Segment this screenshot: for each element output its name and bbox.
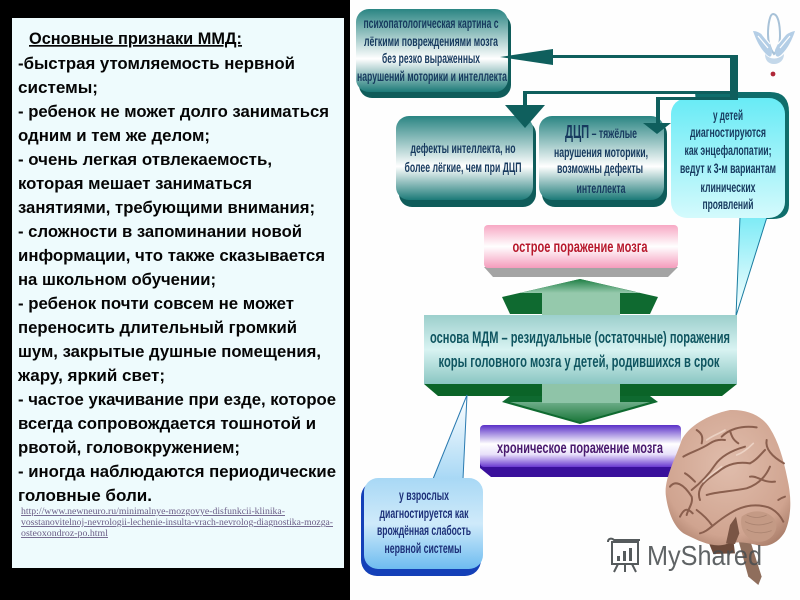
- arrow: to intellect defects box: [505, 91, 733, 128]
- source link: [21, 506, 333, 538]
- text block: list of signs: информации, что также сказывается: [18, 246, 325, 265]
- box: intellect defects: более лёгкие, чем при ДЦП: [404, 159, 522, 175]
- callout: in children: у детей: [713, 107, 743, 123]
- bar: chronic brain damage: хроническое поражение мозга: [497, 440, 663, 457]
- watermark: MyShared: [608, 539, 762, 572]
- text block: list of signs: - ребенок почти совсем не может: [18, 294, 294, 313]
- box: cerebral palsy: ДЦП – тяжёлые: [565, 122, 637, 142]
- callout: in children: [671, 92, 789, 316]
- bar: acute brain damage: острое поражение мозга: [512, 239, 648, 256]
- text block: list of signs: - частое укачивание при езде, которое: [18, 390, 336, 409]
- callout: in adults: диагностируется как: [380, 505, 469, 521]
- watermark: MyShared: MyShared: [647, 540, 762, 571]
- box: psychopathological picture: лёгкими повреждениями мозга: [364, 33, 498, 49]
- text block: list of signs: переносить длительный громкий: [18, 318, 297, 337]
- text block: list of signs: занятиями, требующими внимания;: [18, 198, 315, 217]
- callout: in adults: врождённая слабость: [377, 522, 471, 538]
- arrow: to cerebral palsy box: [643, 97, 738, 134]
- panel: list of MMD signs: [12, 18, 344, 568]
- text block: list of signs: рвотой, головокружением;: [18, 438, 240, 457]
- bar: chronic brain damage: [480, 425, 681, 477]
- text block: list of signs: одним и тем же делом;: [18, 126, 210, 145]
- white right panel background: [350, 0, 800, 600]
- box: cerebral palsy: интеллекта: [576, 180, 626, 196]
- box: cerebral palsy: нарушения моторики,: [554, 144, 648, 160]
- box: psychopathological picture: без резко выраженных: [382, 50, 480, 66]
- callout: in adults: [361, 395, 483, 576]
- text block: list of signs: головные боли.: [18, 486, 152, 505]
- text block: list of signs: - сложности в запоминании новой: [18, 222, 302, 241]
- box: intellect defects: [396, 116, 536, 207]
- heading: main signs of MMD: Основные признаки ММД:: [29, 29, 242, 48]
- callout: in children: проявлений: [702, 196, 754, 212]
- text block: list of signs: всегда сопровождается тошнотой и: [18, 414, 316, 433]
- text block: list of signs: жару, яркий свет;: [17, 366, 165, 385]
- text block: list of signs: -быстрая утомляемость нервной: [18, 54, 295, 73]
- text block: list of signs: - очень легкая отвлекаемость,: [18, 150, 272, 169]
- text block: list of signs: которая мешает заниматься: [18, 174, 252, 193]
- band: basis of MDM: [424, 315, 737, 384]
- text block: list of signs: [17, 54, 336, 505]
- double arrow: acute and chronic: [424, 279, 737, 424]
- source link: osteoxondroz-po.html: [21, 528, 109, 538]
- logo: winged emblem: [753, 14, 795, 76]
- box: intellect defects: дефекты интеллекта, но: [410, 140, 516, 156]
- text block: list of signs: на школьном обучении;: [18, 270, 216, 289]
- text block: list of signs: - ребенок не может долго заниматься: [18, 102, 329, 121]
- box: psychopathological picture: нарушений моторики и интеллекта: [357, 68, 507, 84]
- callout: in adults: у взрослых: [399, 487, 449, 503]
- bar: acute brain damage: [484, 225, 678, 277]
- arrow: to psychopathological box: [500, 49, 738, 98]
- box: psychopathological picture: [356, 9, 511, 98]
- icon: presentation board: [608, 539, 640, 572]
- text block: list of signs: шум, закрытые душные помещения,: [18, 342, 321, 361]
- text block: list of signs: системы;: [18, 78, 98, 97]
- callout: in adults: нервной системы: [384, 540, 462, 556]
- text block: list of signs: - иногда наблюдаются периодические: [18, 462, 336, 481]
- callout: in children: клинических: [700, 179, 756, 195]
- box: cerebral palsy: возможны дефекты: [557, 160, 643, 176]
- box: psychopathological picture: психопатологическая картина с: [364, 15, 499, 31]
- source link: http://www.newneuro.ru/minimalnye-mozgovye-disfunkcii-klinika-: [21, 506, 285, 516]
- box: cerebral palsy: [539, 116, 667, 207]
- source link: vosstanovitelnoj-nevrologii-lechenie-insulta-vrach-nevrolog-diagnostika-mozga-: [21, 517, 333, 527]
- illustration: brain: [666, 410, 790, 585]
